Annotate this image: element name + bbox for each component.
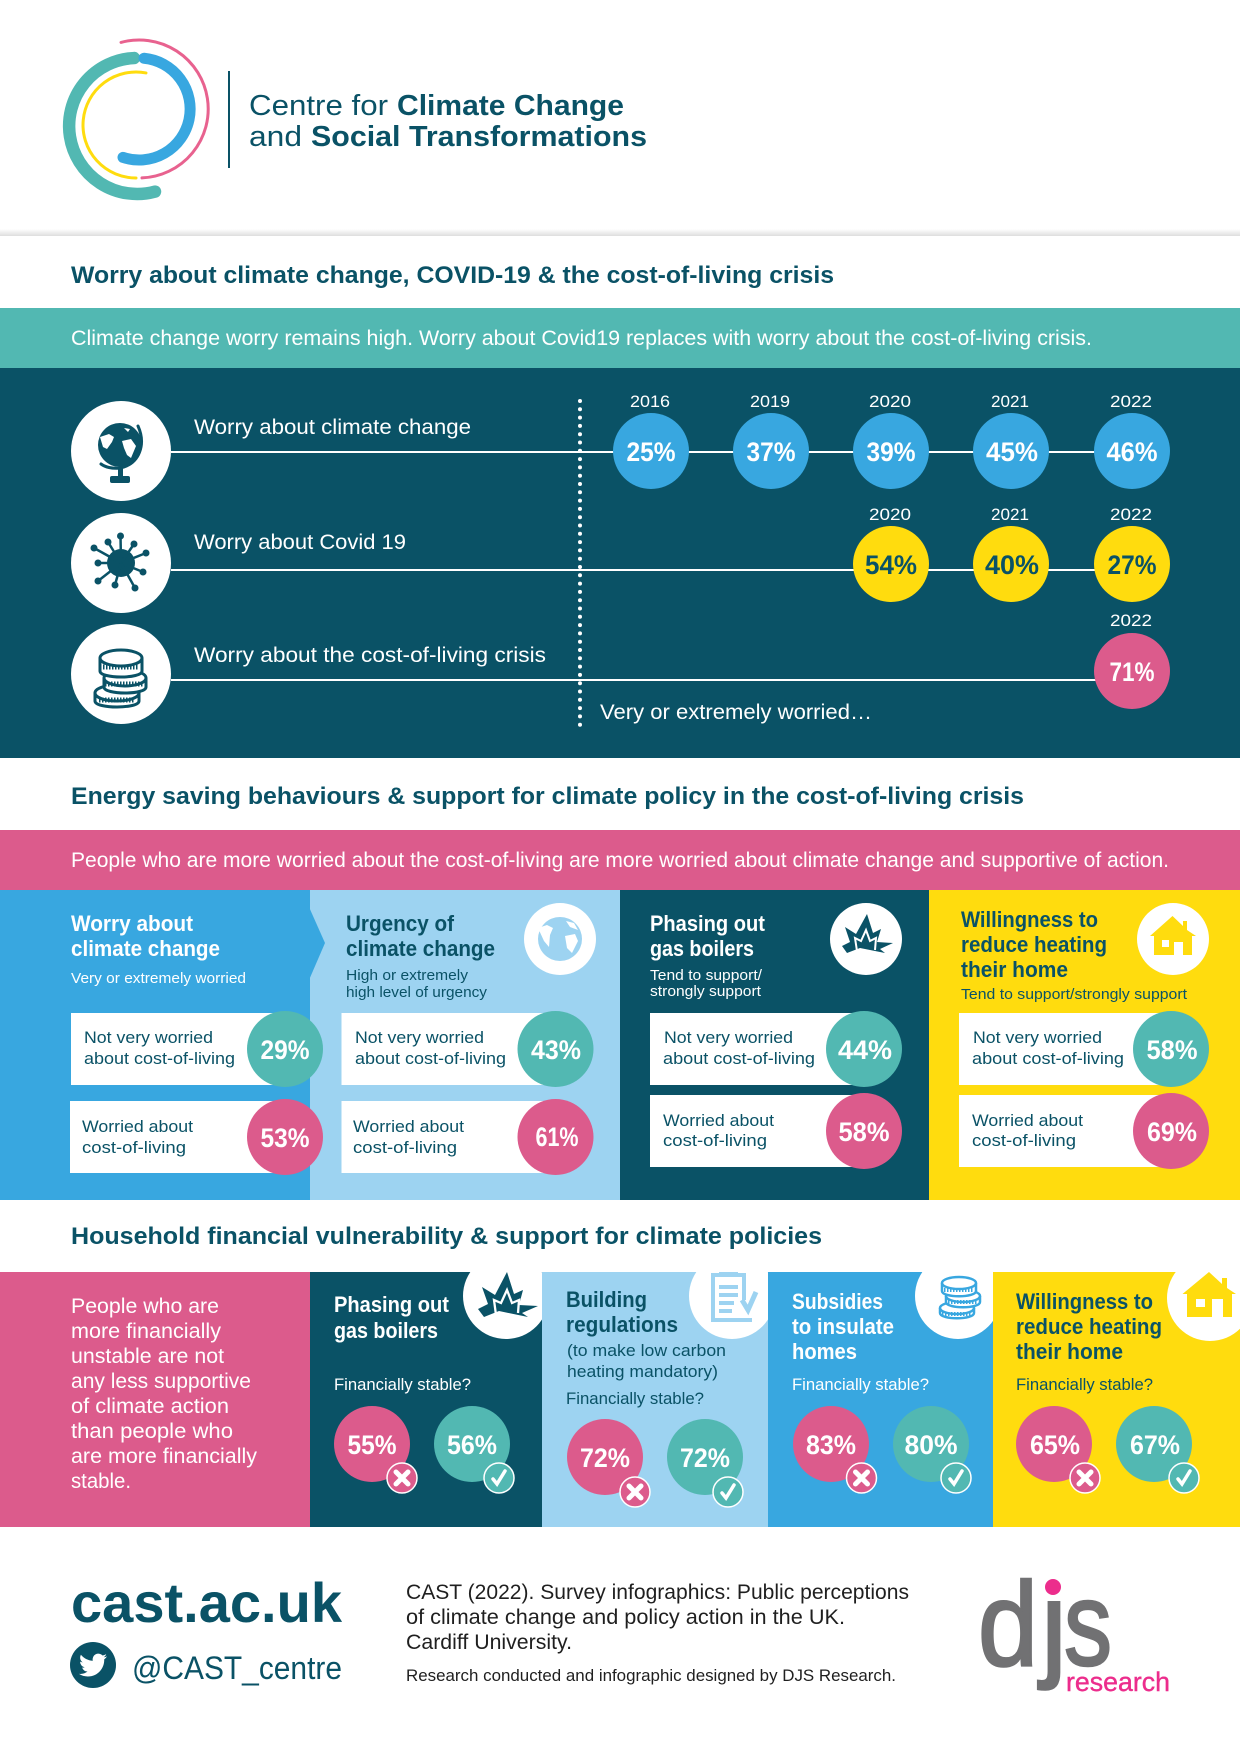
panel: willingness to reduce heating bbox=[959, 903, 1209, 1169]
panel backgrounds: section 2 bbox=[0, 890, 1240, 1200]
panel: worry about climate change: Very or extremely worried bbox=[71, 970, 246, 987]
logo: wordmark: and bbox=[249, 121, 302, 153]
panel: willingness to reduce heating: Not very worried bbox=[973, 1028, 1102, 1047]
data: covid worry by year: 2020 bbox=[869, 506, 911, 524]
panel: building regulations, by stability: Building bbox=[566, 1287, 647, 1312]
panel: urgency of climate change: Worried about bbox=[353, 1117, 464, 1136]
logo: DJS Research bbox=[978, 1558, 1170, 1697]
icon: gas flame burst bbox=[463, 1272, 542, 1339]
data: climate change worry by year: 37% bbox=[746, 437, 796, 467]
data: cost of living worry: 71% bbox=[1110, 657, 1154, 687]
panel: financial stability summary: any less supportive bbox=[71, 1370, 251, 1393]
icon: gas flame burst bbox=[830, 903, 902, 975]
panel: willingness to reduce heating: cost-of-living bbox=[972, 1131, 1076, 1150]
panel: phasing out gas boilers, by stability: Phasing out bbox=[334, 1292, 450, 1317]
data: climate change worry by year: 2020 bbox=[869, 393, 911, 411]
panel: phasing out gas boilers: Not very worried bbox=[664, 1028, 793, 1047]
panel: worry about climate change: 29% bbox=[260, 1035, 310, 1065]
panel: subsidies to insulate homes, by stability: 80% bbox=[904, 1430, 958, 1460]
logo: DJS Research: j bbox=[1038, 1558, 1067, 1691]
data: climate change worry by year: 45% bbox=[986, 437, 1038, 467]
data: climate change worry by year: 2021 bbox=[991, 393, 1029, 411]
panel: urgency of climate change: about cost-of-living bbox=[355, 1049, 506, 1068]
data: climate change worry by year: 39% bbox=[866, 437, 916, 467]
panel: urgency of climate change: 43% bbox=[531, 1035, 581, 1065]
panel: building regulations, by stability: (to make low carbon bbox=[567, 1341, 726, 1360]
footer: citation: of climate change and policy action in the UK. bbox=[406, 1606, 845, 1629]
band: section 1 summary bbox=[0, 308, 1240, 368]
panel: willingness to reduce heating: reduce heating bbox=[961, 932, 1107, 957]
panel: worry about climate change: cost-of-living bbox=[82, 1138, 186, 1157]
panel: urgency of climate change: High or extremely bbox=[346, 967, 469, 984]
panel: worry about climate change: Worry about bbox=[71, 911, 194, 936]
panel: willingness to reduce heating: Worried about bbox=[972, 1111, 1083, 1130]
panel: willingness to reduce heating, by stability: Willingness to bbox=[1016, 1289, 1153, 1314]
panel: urgency of climate change: Urgency of bbox=[346, 911, 455, 936]
footer: website: cast.ac.uk bbox=[71, 1571, 343, 1634]
panel: urgency of climate change: 61% bbox=[536, 1122, 578, 1152]
icon: coins bbox=[915, 1272, 993, 1339]
panel: financial stability summary: more financially bbox=[71, 1320, 221, 1343]
row label: covid: Worry about Covid 19 bbox=[194, 531, 406, 554]
panel: subsidies to insulate homes, by stability: 83% bbox=[806, 1430, 856, 1460]
panel: worry about climate change: Worried about bbox=[82, 1117, 193, 1136]
panel: building regulations, by stability: heating mandatory) bbox=[567, 1362, 718, 1381]
panel: building regulations, by stability: 72% bbox=[580, 1443, 630, 1473]
data: climate change worry by year: 25% bbox=[626, 437, 676, 467]
panel: subsidies to insulate homes, by stability: Subsidies bbox=[792, 1289, 883, 1314]
panel: willingness to reduce heating, by stability bbox=[993, 1255, 1240, 1527]
heading: section 2: Energy saving behaviours & support for climate policy in the cost-of-living crisis bbox=[71, 783, 1024, 810]
logo: wordmark bbox=[228, 71, 647, 168]
logo: wordmark: Centre for bbox=[249, 90, 388, 122]
panel: phasing out gas boilers: Phasing out bbox=[650, 911, 766, 936]
panel: financial stability summary bbox=[0, 1272, 310, 1527]
panel: willingness to reduce heating, by stability: their home bbox=[1016, 1339, 1123, 1364]
icon: virus bbox=[71, 513, 171, 613]
panel: subsidies to insulate homes, by stability: Financially stable? bbox=[792, 1375, 929, 1394]
panel: financial stability summary: People who are bbox=[71, 1295, 219, 1318]
panel: building regulations, by stability: Financially stable? bbox=[566, 1389, 704, 1408]
panel: willingness to reduce heating: Tend to support/strongly support bbox=[961, 986, 1188, 1003]
data: covid worry by year: 2022 bbox=[1110, 506, 1152, 524]
band: section 1 summary: Climate change worry remains high. Worry about Covid19 replaces with worry about the cost-of-living crisis. bbox=[71, 327, 1092, 350]
heading: section 1: Worry about climate change, COVID-19 & the cost-of-living crisis bbox=[71, 262, 834, 289]
panel: urgency of climate change: climate change bbox=[346, 936, 495, 961]
panel: financial stability summary: than people who bbox=[71, 1420, 233, 1443]
panel: worry trends bbox=[0, 368, 1240, 758]
logo: wordmark: Social Transformations bbox=[311, 121, 647, 153]
panel: worry about climate change: about cost-of-living bbox=[84, 1049, 235, 1068]
data: cost of living worry bbox=[1094, 612, 1170, 709]
panel: phasing out gas boilers: 58% bbox=[838, 1117, 890, 1147]
panel: building regulations, by stability: 72% bbox=[680, 1443, 730, 1473]
data: climate change worry by year bbox=[613, 393, 1170, 489]
panel: urgency of climate change: cost-of-living bbox=[353, 1138, 457, 1157]
logo: DJS Research: s bbox=[1064, 1558, 1112, 1691]
icon: house bbox=[1167, 1272, 1240, 1341]
footer: citation bbox=[406, 1581, 909, 1685]
panel: willingness to reduce heating: their home bbox=[961, 957, 1068, 982]
panel: phasing out gas boilers, by stability: gas boilers bbox=[334, 1318, 438, 1343]
logo: CAST rings bbox=[69, 40, 208, 194]
icon: coins bbox=[71, 624, 171, 724]
logo: wordmark: Climate Change bbox=[397, 90, 624, 122]
icon: house bbox=[1137, 903, 1209, 975]
footer: citation: CAST (2022). Survey infographics: Public perceptions bbox=[406, 1581, 909, 1604]
panel: subsidies to insulate homes, by stability: to insulate bbox=[792, 1314, 894, 1339]
panel: financial stability summary: unstable are not bbox=[71, 1345, 224, 1368]
panel: phasing out gas boilers: 44% bbox=[838, 1035, 892, 1065]
panel: phasing out gas boilers: Tend to support/ bbox=[650, 967, 763, 984]
panel: phasing out gas boilers, by stability: 55% bbox=[348, 1430, 396, 1460]
data: covid worry by year: 40% bbox=[985, 550, 1039, 580]
panel: willingness to reduce heating: 58% bbox=[1146, 1035, 1198, 1065]
panel: phasing out gas boilers: gas boilers bbox=[650, 936, 754, 961]
panel: willingness to reduce heating, by stability: 67% bbox=[1130, 1430, 1180, 1460]
panel: worry about climate change: climate change bbox=[71, 936, 220, 961]
panel: financial stability summary: are more financially bbox=[71, 1445, 257, 1468]
band: section 2 summary: People who are more worried about the cost-of-living are more worried about climate change and supportive of action. bbox=[71, 849, 1169, 872]
data: covid worry by year: 54% bbox=[865, 550, 917, 580]
panel: willingness to reduce heating: Willingness to bbox=[961, 907, 1098, 932]
data: climate change worry by year: 46% bbox=[1106, 437, 1158, 467]
panel: urgency of climate change bbox=[342, 903, 596, 1175]
panel: urgency of climate change: high level of urgency bbox=[346, 984, 488, 1001]
panel: phasing out gas boilers: cost-of-living bbox=[663, 1131, 767, 1150]
row label: climate change: Worry about climate change bbox=[194, 416, 471, 439]
logo: DJS Research: research bbox=[1066, 1667, 1170, 1697]
footer: twitter handle: @CAST_centre bbox=[132, 1650, 342, 1686]
panel: urgency of climate change: Not very worried bbox=[355, 1028, 484, 1047]
panel: phasing out gas boilers, by stability: 56% bbox=[447, 1430, 497, 1460]
data: covid worry by year bbox=[853, 506, 1170, 602]
panel: financial stability summary: stable. bbox=[71, 1470, 131, 1493]
panel: phasing out gas boilers bbox=[650, 903, 902, 1169]
row label: cost of living: Worry about the cost-of-living crisis bbox=[194, 644, 546, 667]
panel: phasing out gas boilers: strongly support bbox=[650, 983, 762, 1000]
panel: phasing out gas boilers, by stability: Financially stable? bbox=[334, 1375, 471, 1394]
icon: checklist document bbox=[689, 1272, 768, 1339]
panel: worry about climate change: Not very worried bbox=[84, 1028, 213, 1047]
icon: globe bbox=[524, 903, 596, 975]
logo: DJS Research: d bbox=[978, 1558, 1038, 1691]
panel: subsidies to insulate homes, by stability bbox=[768, 1272, 993, 1527]
data: climate change worry by year: 2019 bbox=[750, 393, 790, 411]
data: covid worry by year: 2021 bbox=[991, 506, 1029, 524]
panel: worry about climate change bbox=[70, 911, 323, 1175]
data: covid worry by year: 27% bbox=[1108, 550, 1156, 580]
footer: twitter icon bbox=[70, 1642, 116, 1688]
heading: section 3: Household financial vulnerability & support for climate policies bbox=[71, 1223, 822, 1250]
note: very or extremely worried: Very or extremely worried… bbox=[600, 701, 872, 724]
panel: financial stability summary: of climate action bbox=[71, 1395, 229, 1418]
icon: globe bbox=[71, 401, 171, 501]
footer: citation: Cardiff University. bbox=[406, 1631, 572, 1654]
panel: phasing out gas boilers: Worried about bbox=[663, 1111, 774, 1130]
band: section 2 summary bbox=[0, 830, 1240, 890]
panel: phasing out gas boilers: about cost-of-living bbox=[663, 1049, 815, 1068]
panel: worry about climate change: 53% bbox=[260, 1123, 310, 1153]
panel: building regulations, by stability: regulations bbox=[566, 1312, 678, 1337]
data: climate change worry by year: 2022 bbox=[1110, 393, 1152, 411]
panel: willingness to reduce heating: about cost-of-living bbox=[972, 1049, 1124, 1068]
panel: willingness to reduce heating: 69% bbox=[1147, 1117, 1197, 1147]
panel: willingness to reduce heating, by stability: reduce heating bbox=[1016, 1314, 1162, 1339]
panel: building regulations, by stability bbox=[542, 1253, 775, 1527]
panel: subsidies to insulate homes, by stability: homes bbox=[792, 1339, 857, 1364]
footer: citation: Research conducted and infographic designed by DJS Research. bbox=[406, 1667, 896, 1685]
panel: willingness to reduce heating, by stability: Financially stable? bbox=[1016, 1375, 1153, 1394]
panel: willingness to reduce heating, by stability: 65% bbox=[1030, 1430, 1080, 1460]
data: cost of living worry: 2022 bbox=[1110, 612, 1152, 630]
panel: phasing out gas boilers, by stability bbox=[310, 1253, 549, 1527]
data: climate change worry by year: 2016 bbox=[630, 393, 670, 411]
